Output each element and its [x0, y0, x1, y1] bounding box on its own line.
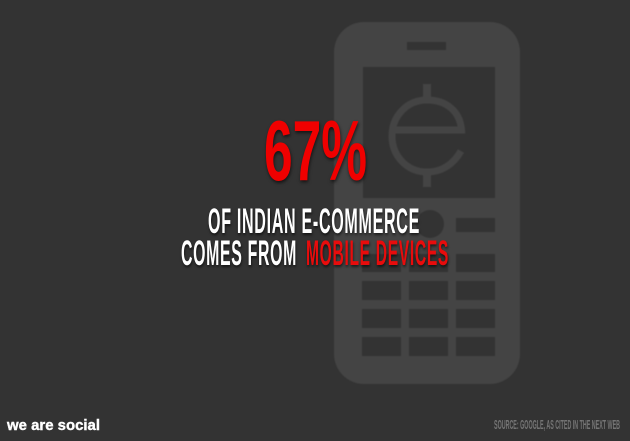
icon: mobile phone [334, 22, 520, 384]
brand: we are social: we are social [6, 417, 100, 434]
statistic: 67%: 67% [264, 104, 367, 199]
text: headline line two: COMES FROM [181, 234, 297, 273]
text: MOBILE DEVICES [306, 234, 449, 273]
